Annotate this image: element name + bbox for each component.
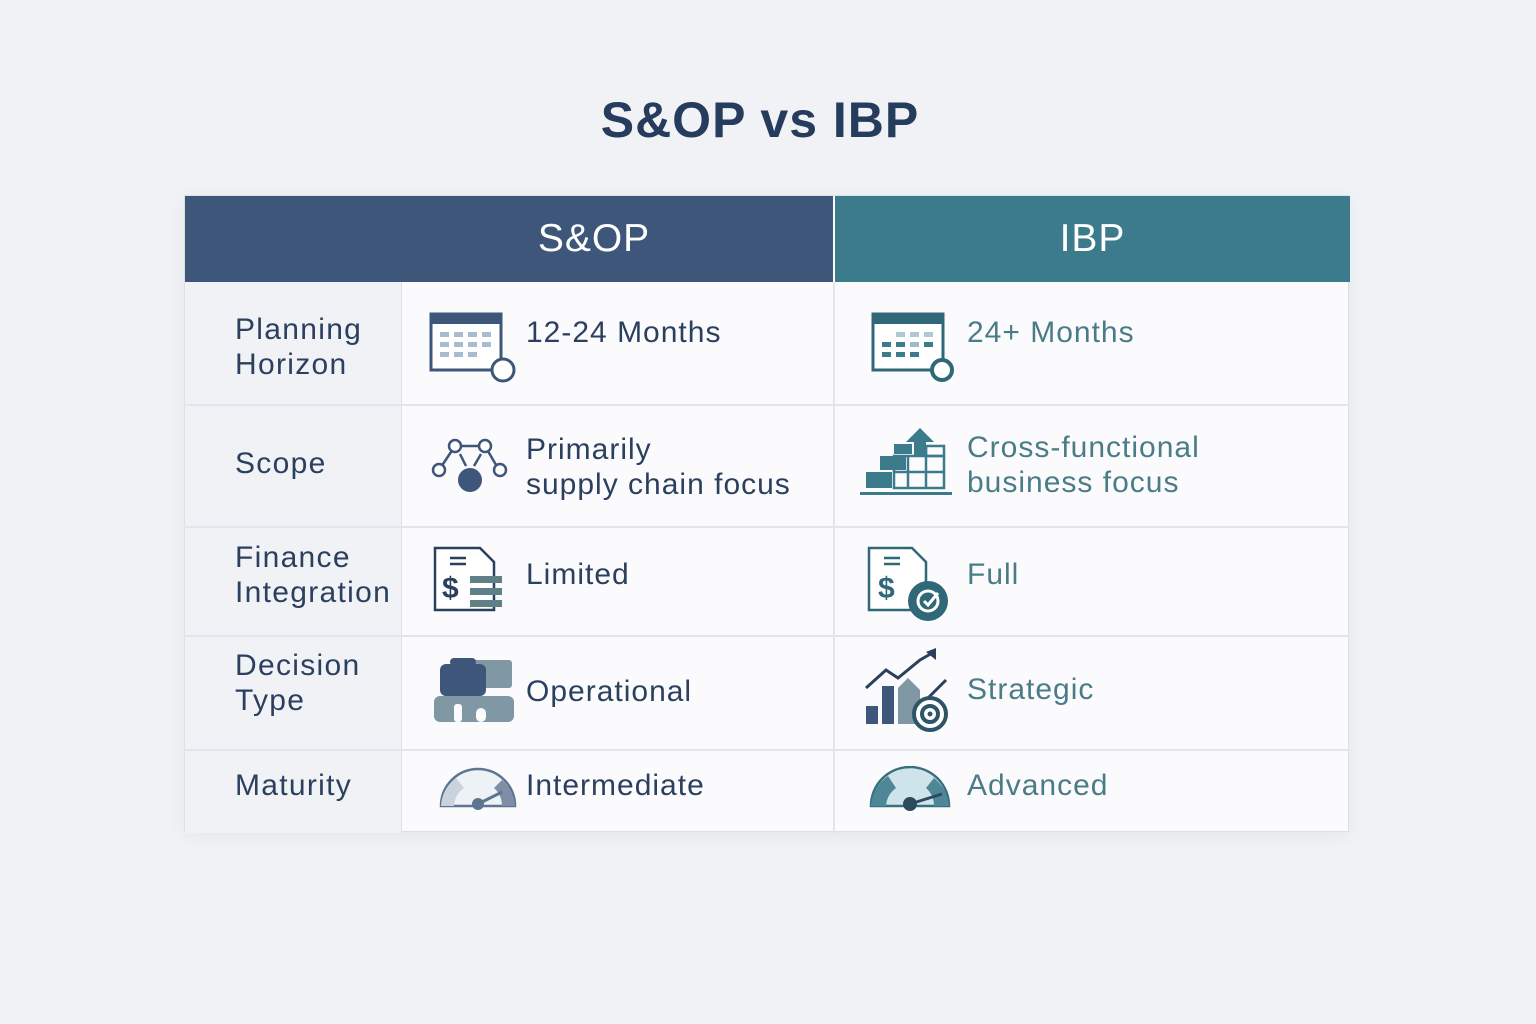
- text: Maturity: [235, 769, 352, 802]
- text: business focus: [967, 466, 1179, 499]
- text: Intermediate: [526, 769, 705, 802]
- icon: finance doc S&OP: [434, 546, 502, 612]
- label column background: [185, 282, 402, 833]
- text: Operational: [526, 675, 692, 708]
- icon: puzzle: [434, 658, 514, 722]
- table: [184, 195, 1349, 832]
- text: Primarily: [526, 433, 652, 466]
- icon: gauge intermediate: [440, 768, 516, 810]
- row labels: [235, 313, 362, 381]
- text: Type: [235, 684, 305, 717]
- icon: gauge advanced: [870, 766, 950, 811]
- icon: calendar S&OP: [430, 312, 516, 382]
- text: Cross-functional: [967, 431, 1200, 464]
- text: supply chain focus: [526, 468, 791, 501]
- icon: finance doc IBP: [868, 546, 948, 621]
- header: IBP: [835, 196, 1350, 282]
- IBP values: 24+ Months: [967, 316, 1135, 349]
- text: Decision: [235, 649, 360, 682]
- header: IBP: IBP: [1060, 217, 1125, 260]
- text: Strategic: [967, 673, 1094, 706]
- text: Advanced: [967, 769, 1108, 802]
- row labels: Planning: [235, 313, 362, 346]
- text: Integration: [235, 576, 391, 609]
- row labels: Horizon: [235, 348, 347, 381]
- text: Finance: [235, 541, 351, 574]
- icon: finance doc S&OP: $: [442, 572, 459, 605]
- S&OP values: 12-24 Months: [526, 316, 721, 349]
- header: S&OP: S&OP: [538, 217, 650, 260]
- text: Scope: [235, 447, 327, 480]
- icon: growth blocks: [860, 428, 952, 495]
- icon: strategy chart: [865, 648, 948, 732]
- title: S&OP vs IBP: [601, 92, 919, 148]
- text: Limited: [526, 558, 630, 591]
- icon: finance doc IBP: $: [878, 572, 895, 605]
- header: S&OP: [185, 196, 833, 282]
- icon: network: [432, 438, 508, 492]
- icon: calendar IBP: [872, 312, 954, 382]
- text: Full: [967, 558, 1019, 591]
